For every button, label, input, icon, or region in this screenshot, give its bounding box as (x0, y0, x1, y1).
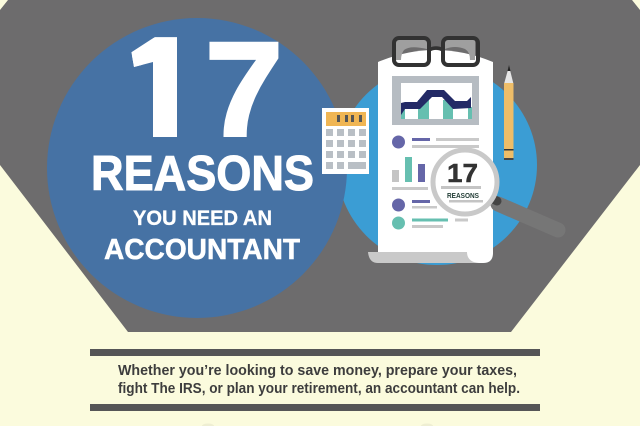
title digit 7: 7 (205, 16, 283, 164)
title (94, 37, 313, 260)
header panel: grey hexagon (0, 0, 640, 332)
icon: glasses (394, 38, 478, 65)
list row 3 (392, 216, 468, 230)
intro text (118, 363, 520, 397)
title digit 1: 1 (122, 10, 200, 167)
lens label 17: 17 (447, 158, 478, 188)
icon: magnifying glass (433, 150, 558, 230)
intro text: fight The IRS, or plan your retirement, an accountant can help. (118, 381, 520, 397)
faint marks at bottom edge (202, 424, 433, 426)
list row 1 (392, 136, 479, 148)
icon: calculator (322, 108, 369, 174)
paper sheet (378, 50, 493, 263)
light blue circle behind illustration (337, 65, 537, 265)
lens label REASONS: REASONS (447, 193, 479, 200)
bar chart (392, 157, 428, 190)
bottom rule (90, 404, 540, 411)
dark blue title circle (47, 18, 347, 318)
title word REASONS: REASONS (91, 147, 314, 201)
intro band (90, 349, 540, 411)
icon: pencil (504, 65, 514, 160)
subtitle YOU NEED AN: YOU NEED AN (133, 206, 272, 230)
magnifier handle (498, 204, 558, 230)
intro text: Whether you’re looking to save money, prepare your taxes, (118, 363, 517, 379)
paper bottom curl (368, 252, 479, 263)
list row 2 (392, 198, 437, 212)
top rule (90, 349, 540, 356)
subtitle ACCOUNTANT: ACCOUNTANT (104, 234, 301, 266)
magnifier lens (433, 150, 497, 214)
line chart frame (392, 76, 479, 125)
icon: document (368, 50, 493, 263)
